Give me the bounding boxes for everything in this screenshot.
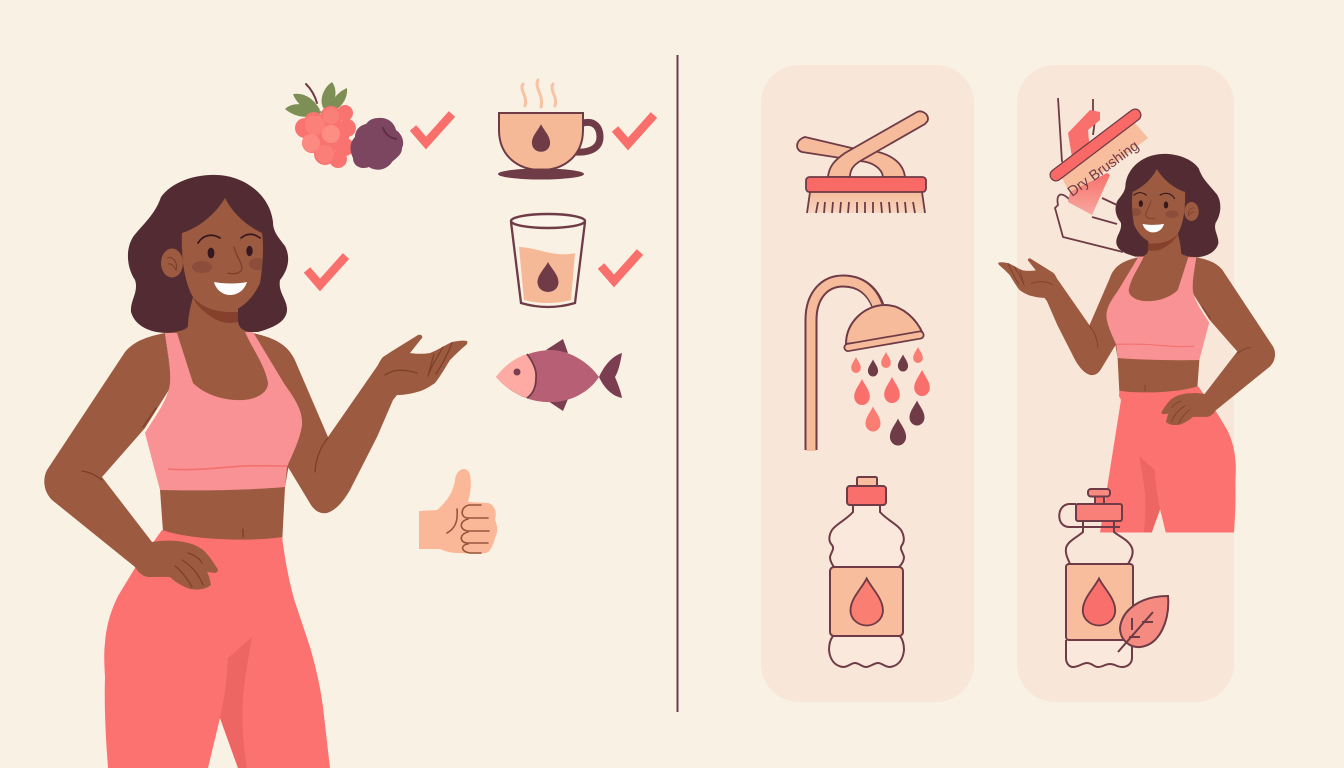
icon: shower <box>811 281 930 451</box>
icon: fish <box>496 339 622 411</box>
left woman figure <box>44 175 467 768</box>
panel: self care tools left <box>761 65 974 702</box>
icon: bottle with leaf <box>1059 489 1168 667</box>
icon: check mark glass <box>601 252 640 281</box>
icon: water bottle <box>829 477 904 667</box>
icon: tea cup <box>498 80 600 180</box>
icon: berries <box>285 82 403 170</box>
panel: self care tools right <box>1017 65 1234 702</box>
icon: check mark beside face <box>307 256 346 285</box>
icon: leaf <box>1118 596 1168 652</box>
icon: check mark berries <box>413 114 452 143</box>
right woman figure <box>998 154 1275 542</box>
icon: dry brush tool <box>797 111 928 213</box>
icon: dry brush with label <box>1055 98 1148 252</box>
brush label text: Dry Brushing <box>1065 138 1142 200</box>
icon: glass of water <box>511 214 585 307</box>
vertical divider <box>676 55 678 712</box>
icon: check mark tea <box>615 115 654 144</box>
icon: thumbs up <box>419 469 497 554</box>
